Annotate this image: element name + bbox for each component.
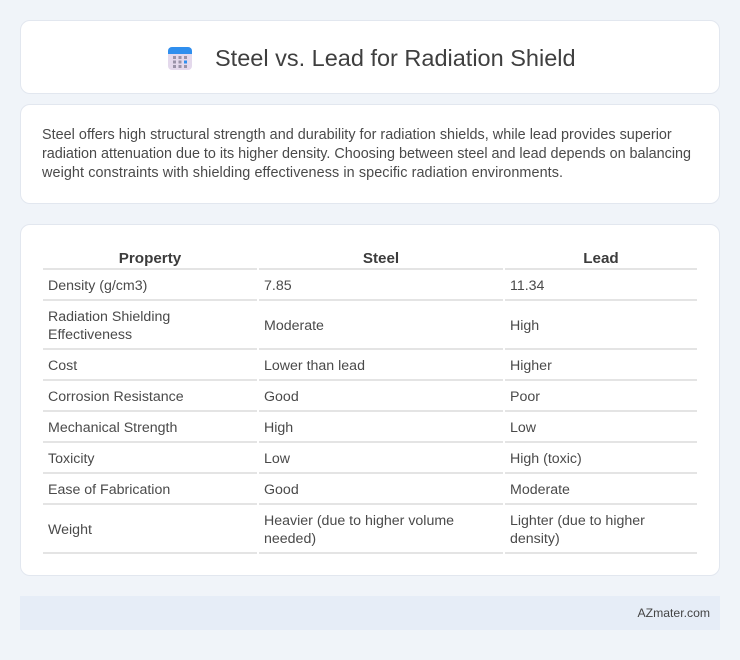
row: ease of fabrication: Good (264, 482, 299, 498)
summary text: weight constraints with shielding effectiveness in specific radiation environments. (42, 165, 563, 181)
row: toxicity: Low (264, 451, 290, 467)
row: mechanical strength (48, 420, 536, 436)
row: cost: Lower than lead (264, 358, 365, 374)
summary text: Steel offers high structural strength and durability for radiation shields, while lead provides superior (42, 127, 672, 143)
panel: summary (20, 104, 720, 204)
row: mechanical strength: Low (510, 420, 536, 436)
table header: Lead (583, 250, 619, 267)
table header: Steel (363, 250, 399, 267)
footer credit: AZmater.com (638, 606, 710, 620)
title: Steel vs. Lead for Radiation Shield (215, 45, 576, 71)
row: weight: Heavier (due to higher volume (264, 513, 454, 529)
summary text (42, 127, 691, 181)
panel: comparison table (20, 224, 720, 576)
row: ease of fabrication: Ease of Fabrication (48, 482, 170, 498)
row: cost: Cost (48, 358, 77, 374)
row: corrosion resistance: Corrosion Resistance (48, 389, 184, 405)
icon: calendar (168, 47, 192, 70)
row: density: 11.34 (510, 278, 544, 294)
row: mechanical strength: High (264, 420, 293, 436)
row: weight: needed) (264, 531, 316, 547)
panel: title card (20, 20, 720, 94)
row: corrosion resistance: Poor (510, 389, 540, 405)
row: ease of fabrication (48, 482, 570, 498)
row: radiation shielding effectiveness (48, 309, 539, 343)
row: ease of fabrication: Moderate (510, 482, 570, 498)
row: density: 7.85 (264, 278, 292, 294)
table header: Property (119, 250, 181, 267)
row: radiation shielding effectiveness: Radiation Shielding (48, 309, 170, 325)
row: weight: Weight (48, 522, 92, 538)
row: cost: Higher (510, 358, 552, 374)
row: weight (48, 513, 645, 547)
row: weight: Lighter (due to higher (510, 513, 645, 529)
row: weight: density) (510, 531, 560, 547)
row: radiation shielding effectiveness: Moderate (264, 318, 324, 334)
row: toxicity: Toxicity (48, 451, 95, 467)
table header (119, 250, 619, 267)
row: corrosion resistance: Good (264, 389, 299, 405)
summary text: radiation attenuation due to its higher density. Choosing between steel and lead depends on balancing (42, 146, 691, 162)
row: mechanical strength: Mechanical Strength (48, 420, 177, 436)
row: cost (48, 358, 552, 374)
row lines (43, 268, 697, 554)
row: toxicity (48, 451, 582, 467)
row: radiation shielding effectiveness: Effectiveness (48, 327, 132, 343)
row: density (48, 278, 544, 294)
row: density: Density (g/cm3) (48, 278, 147, 294)
row: toxicity: High (toxic) (510, 451, 582, 467)
row: radiation shielding effectiveness: High (510, 318, 539, 334)
footer (20, 596, 720, 630)
row: corrosion resistance (48, 389, 540, 405)
